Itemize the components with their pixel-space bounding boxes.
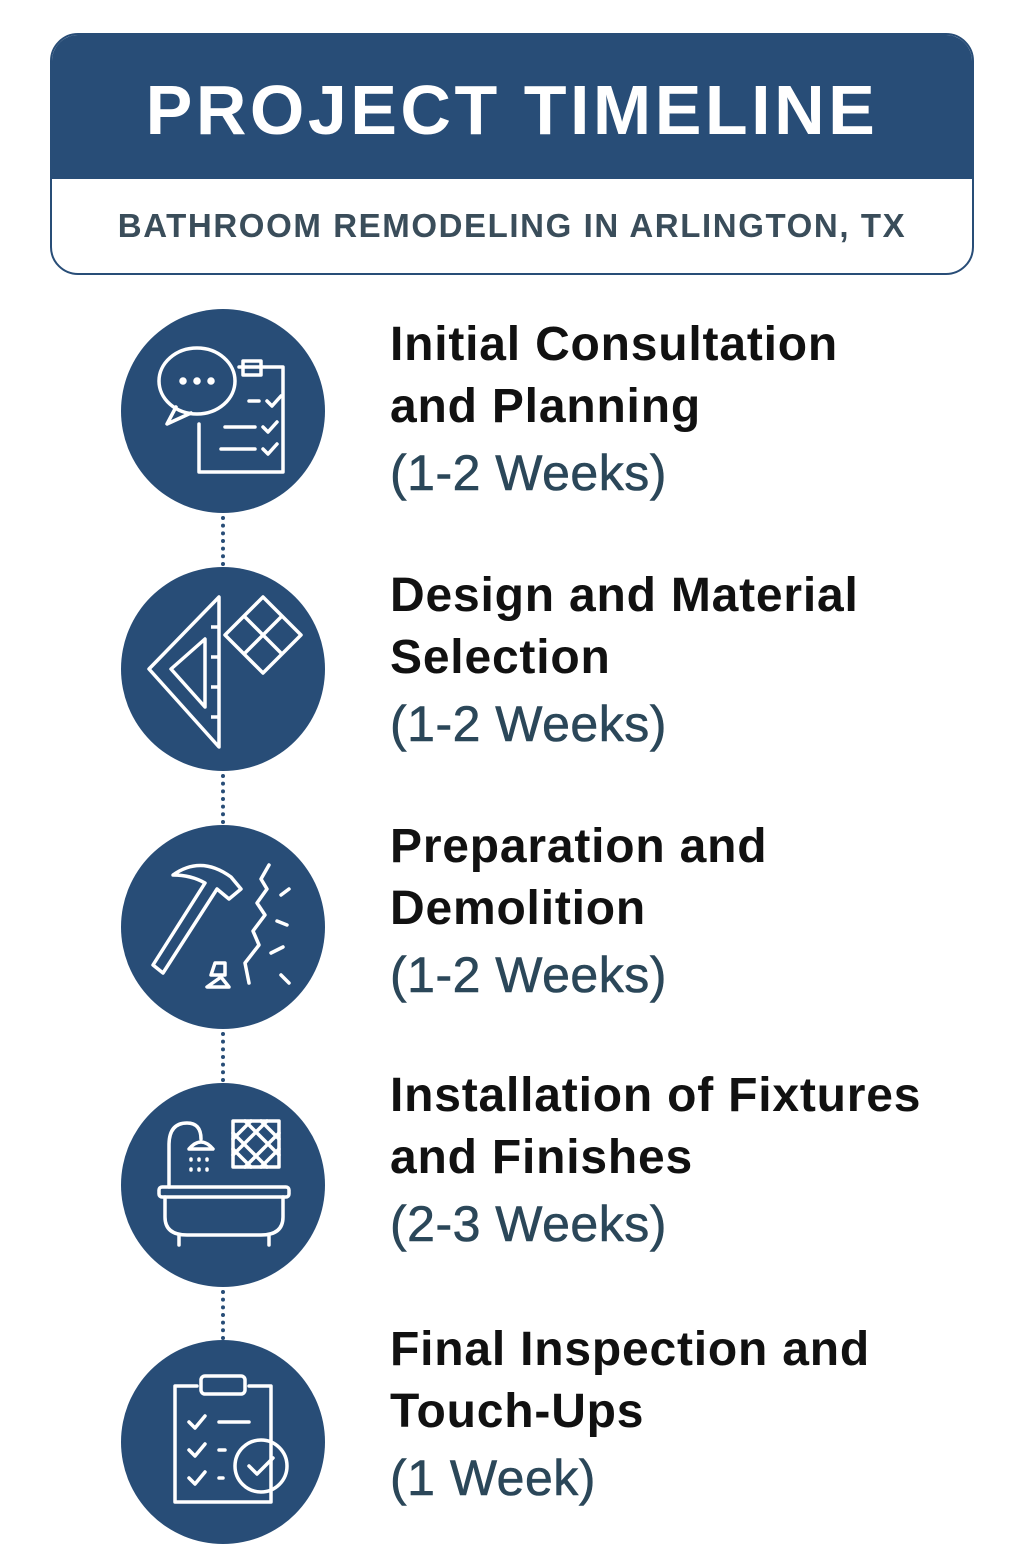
step 3 text: (1-2 Weeks)	[390, 947, 667, 1003]
step 4 text: and Finishes	[390, 1131, 693, 1184]
connector dots 4	[221, 1290, 229, 1340]
step 1 text: (1-2 Weeks)	[390, 445, 667, 501]
subtitle: BATHROOM REMODELING IN ARLINGTON, TX	[118, 207, 906, 244]
title: PROJECT TIMELINE	[146, 71, 878, 149]
connector dots 3	[221, 1032, 229, 1082]
icon: demolition	[121, 825, 325, 1029]
step 2 text: (1-2 Weeks)	[390, 696, 667, 752]
step 4 text: Installation of Fixtures	[390, 1069, 921, 1122]
header	[50, 33, 974, 275]
step 3 text	[390, 820, 767, 1003]
step 3 text: Demolition	[390, 882, 646, 935]
title	[52, 35, 972, 179]
icon: inspection	[121, 1340, 325, 1544]
step 3 text: Preparation and	[390, 820, 767, 873]
connector dots	[221, 516, 229, 566]
icon: bathtub	[121, 1083, 325, 1287]
icon: design	[121, 567, 325, 771]
step 5 text: Touch-Ups	[390, 1385, 644, 1438]
step 1 text: Initial Consultation	[390, 318, 838, 371]
step 4 text: (2-3 Weeks)	[390, 1196, 667, 1252]
connector dots 2	[221, 774, 229, 824]
step 5 text	[390, 1323, 870, 1506]
step 1 text: and Planning	[390, 380, 701, 433]
step 4 text	[390, 1069, 921, 1252]
step 5 text: Final Inspection and	[390, 1323, 870, 1376]
step 1 text	[390, 318, 838, 501]
icon: consultation	[121, 309, 325, 513]
step 2 text: Design and Material	[390, 569, 859, 622]
step 2 text	[390, 569, 859, 752]
step 2 text: Selection	[390, 631, 611, 684]
step 5 text: (1 Week)	[390, 1450, 596, 1506]
